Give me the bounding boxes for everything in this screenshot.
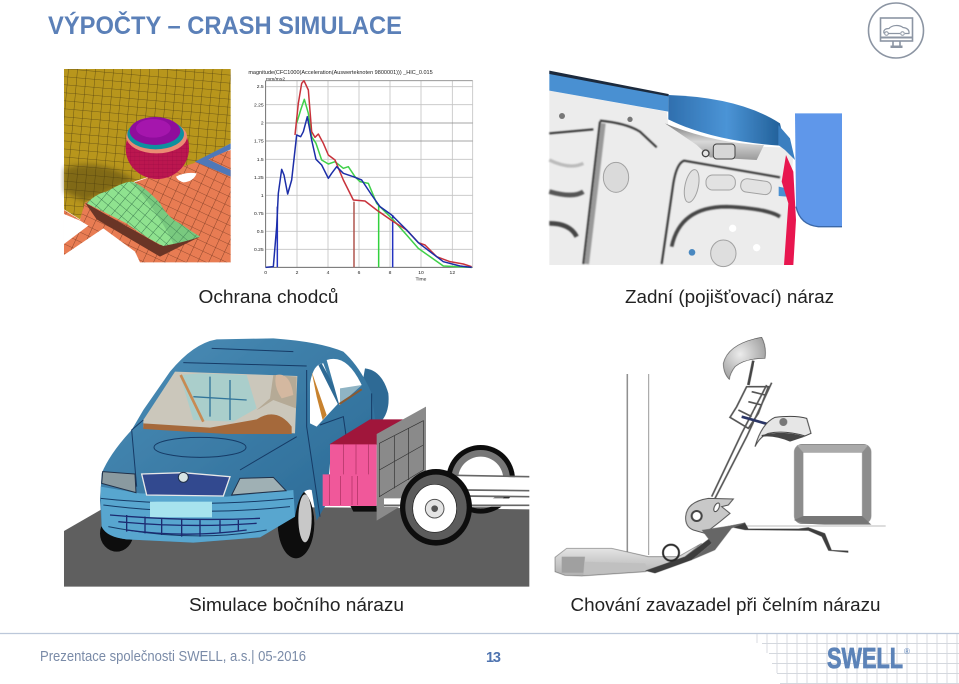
box dummy <box>794 444 871 524</box>
chart title: magnitude(CFC1000(Acceleration(Auswerteknoten 9800001))) _HIC_0.015 <box>248 70 433 76</box>
caption: restraint behavior: Chování zavazadel při čelním nárazu <box>570 595 880 615</box>
impactor ball <box>126 117 189 179</box>
license plate <box>150 502 212 517</box>
orange lower structure <box>64 150 231 262</box>
logo: SWELL: SWELL <box>827 643 903 675</box>
footer grid <box>757 634 959 684</box>
lower grille <box>110 515 260 537</box>
car body <box>100 338 375 543</box>
y axis labels: 0.75 <box>254 211 264 217</box>
buckle loop <box>663 545 679 561</box>
blue rear beam <box>549 71 668 112</box>
rear wheel <box>446 445 515 514</box>
blue barrier block <box>795 113 842 227</box>
panel: pedestrian impact mesh <box>64 69 231 262</box>
x axis labels <box>264 270 455 282</box>
trolley frame <box>384 476 529 507</box>
seat back frame <box>712 361 777 498</box>
blue dome <box>668 95 785 146</box>
y axis labels: 2 <box>261 121 264 127</box>
car rear bulge <box>360 368 389 427</box>
recliner <box>686 498 733 533</box>
head restraint <box>723 337 765 379</box>
interior <box>180 373 257 422</box>
hood shadow <box>64 164 135 202</box>
page number: 13 <box>486 650 501 666</box>
floor panel <box>549 91 793 265</box>
x axis labels: 4 <box>327 270 330 276</box>
x axis labels: 12 <box>450 270 455 276</box>
unit label: mm/ms2 <box>266 77 285 83</box>
white cutouts <box>64 214 88 244</box>
footer <box>0 634 959 684</box>
x axis labels: Time <box>416 276 427 282</box>
limit markers <box>352 202 356 267</box>
panel: rear impact model <box>549 71 842 267</box>
barrier face plate <box>377 407 426 521</box>
windshield <box>143 372 297 433</box>
yellow hood mesh <box>64 69 231 219</box>
spare wheel well <box>665 123 764 160</box>
x axis labels: 2 <box>296 270 299 276</box>
caption: rear insurance impact: Zadní (pojišťovací) náraz <box>625 287 834 307</box>
y axis labels <box>254 84 264 253</box>
green part shading <box>132 182 200 244</box>
rear wheel shadow <box>350 505 377 512</box>
holes <box>559 113 565 119</box>
ground plane <box>64 507 529 587</box>
front wheel rim <box>298 494 312 542</box>
floor line <box>745 524 886 527</box>
seat floor rail <box>645 523 848 573</box>
near wheel <box>400 469 472 546</box>
y axis labels: 0.25 <box>254 247 264 253</box>
red curve <box>295 81 472 267</box>
seat cushion <box>555 543 702 576</box>
x axis labels: 10 <box>418 270 424 276</box>
front tyres <box>100 515 133 552</box>
dark rail <box>85 203 200 257</box>
body lines <box>132 348 372 517</box>
y axis labels: 2.5 <box>257 84 264 90</box>
title: VÝPOČTY – CRASH SIMULACE <box>48 10 402 40</box>
caption: side impact: Simulace bočního nárazu <box>189 595 404 615</box>
chart: HIC acceleration over time <box>248 70 473 282</box>
grille <box>142 473 230 496</box>
blue curve <box>266 117 472 267</box>
white opening <box>176 173 197 182</box>
footer text: Prezentace společnosti SWELL, a.s.| 05-2016 <box>40 649 306 665</box>
upper belt anchor <box>755 416 811 447</box>
x axis labels: 0 <box>264 270 267 276</box>
green deformed part <box>87 182 200 246</box>
y axis labels: 1.5 <box>257 157 264 163</box>
panel: restraint behavior <box>555 337 886 576</box>
x axis labels: 6 <box>358 270 361 276</box>
bumper lines <box>101 498 293 536</box>
panel: side impact simulation <box>64 338 529 587</box>
y axis labels: 1.25 <box>254 175 264 181</box>
dashboard <box>143 414 292 434</box>
y axis labels: 1.75 <box>254 139 264 145</box>
red bumper strip <box>782 155 796 265</box>
front bumper <box>101 487 295 543</box>
side windows <box>310 363 338 427</box>
caption: pedestrian protection: Ochrana chodců <box>198 287 338 307</box>
blue edge strip <box>195 143 231 177</box>
y axis labels: 1 <box>261 193 264 199</box>
stamped recesses <box>603 144 772 267</box>
headlights <box>102 472 136 493</box>
green curve <box>297 99 472 267</box>
barrier top <box>329 419 403 445</box>
y axis labels: 2.25 <box>254 102 264 108</box>
logo: SWELL: ® <box>904 647 910 656</box>
y axis labels: 0.5 <box>257 229 264 235</box>
x axis labels: 8 <box>389 270 392 276</box>
vertical guide lines <box>626 374 629 553</box>
icon: car on monitor <box>868 3 924 58</box>
barrier pink blocks <box>323 444 377 506</box>
panel creases <box>549 121 780 264</box>
